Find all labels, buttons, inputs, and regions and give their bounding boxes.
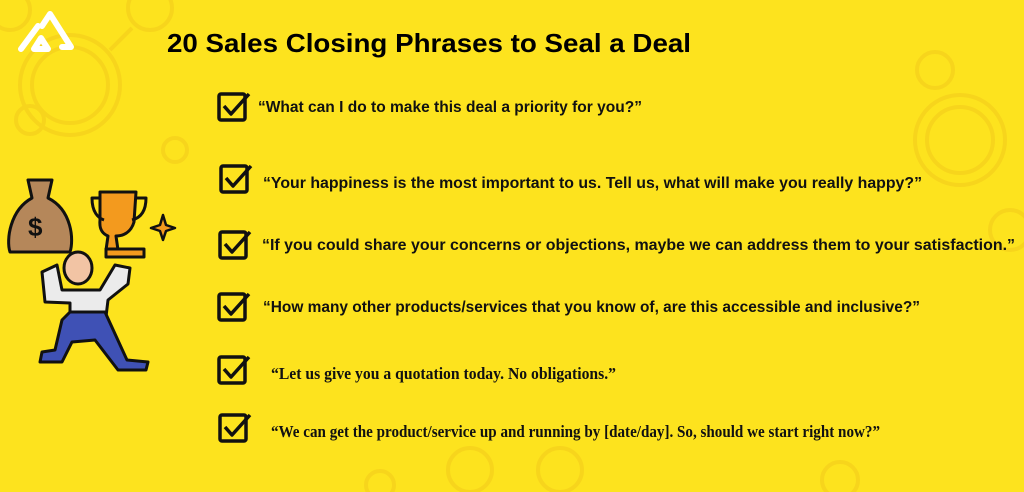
phrases: “How many other products/services that you know of, are this accessible and inclusive?” [263, 299, 920, 316]
title: 20 Sales Closing Phrases to Seal a Deal [167, 28, 691, 58]
logo [21, 14, 71, 49]
phrases: “What can I do to make this deal a priority for you?” [258, 99, 642, 116]
text: “We can get the product/service up and running by [date/day]. So, should we start right now?” [271, 422, 880, 441]
phrases: “If you could share your concerns or objections, maybe we can address them to your satisfaction.” [262, 237, 1015, 254]
illustration: person with money bag and trophy [9, 180, 175, 370]
phrases: “Your happiness is the most important to us. Tell us, what will make you really happy?” [263, 175, 922, 192]
text: “Let us give you a quotation today. No obligations.” [271, 364, 616, 383]
text: $ [28, 212, 43, 242]
checklist [219, 94, 251, 441]
phrases [258, 99, 1015, 316]
